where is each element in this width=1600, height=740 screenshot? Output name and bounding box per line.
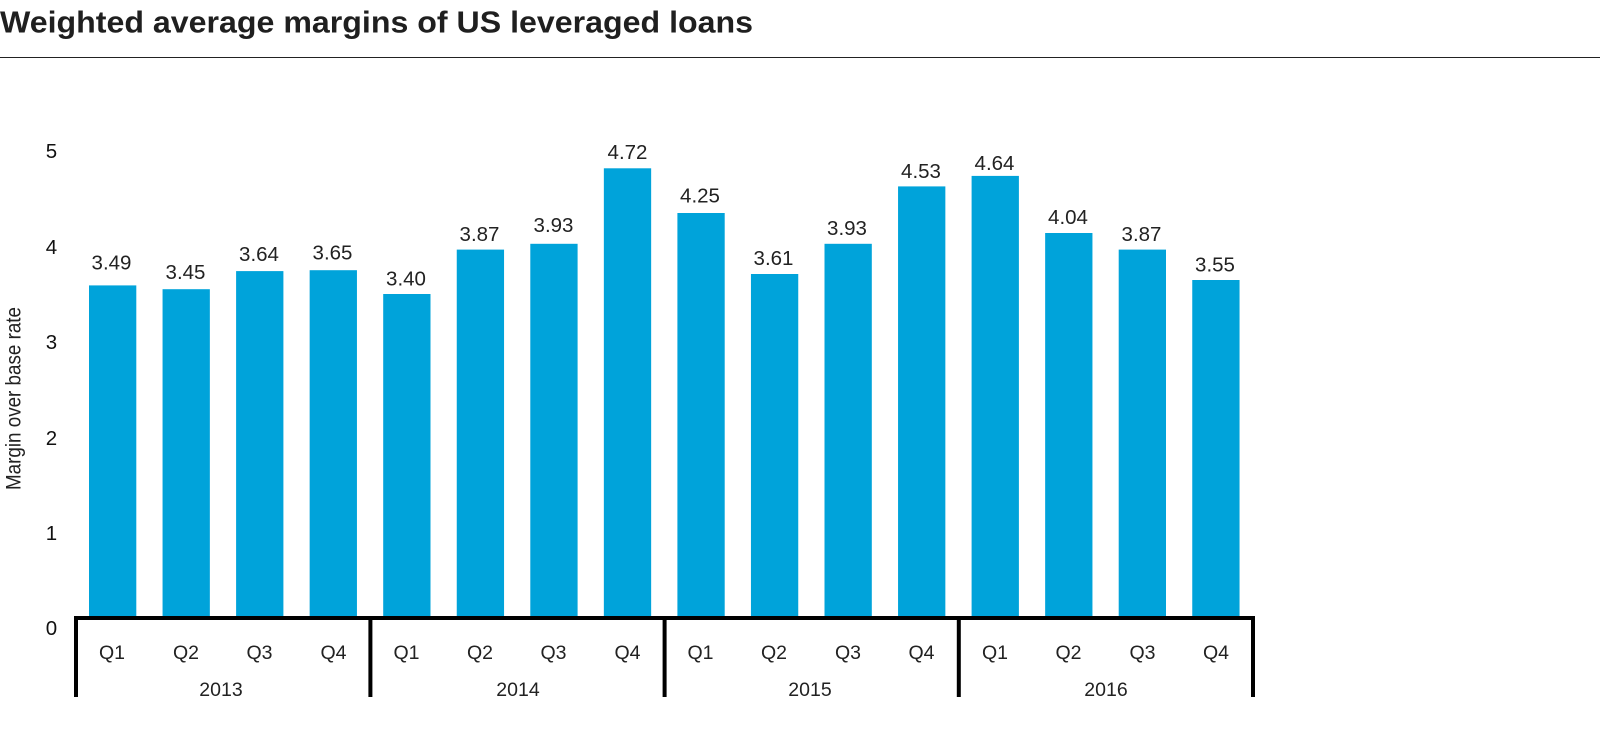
bars <box>89 168 1240 618</box>
year labels <box>199 679 1128 701</box>
y axis labels: 1 <box>46 522 57 545</box>
quarter labels: Q4 <box>614 642 641 664</box>
y axis labels: 2 <box>46 427 57 450</box>
quarter labels: Q1 <box>393 642 420 664</box>
y axis labels: 3 <box>46 331 57 354</box>
value labels: 3.87 <box>460 223 499 246</box>
year labels: 2013 <box>199 679 243 701</box>
title: Weighted average margins of US leveraged loans <box>0 4 753 40</box>
value labels: 3.87 <box>1122 223 1161 246</box>
quarter labels: Q4 <box>1203 642 1229 664</box>
value labels: 3.65 <box>313 242 352 264</box>
quarter labels: Q1 <box>99 642 125 664</box>
value labels: 3.40 <box>386 268 426 290</box>
value labels: 3.93 <box>827 217 867 240</box>
year labels: 2016 <box>1084 679 1128 701</box>
y axis labels <box>46 140 57 640</box>
quarter labels: Q1 <box>982 642 1008 664</box>
value labels: 3.49 <box>92 252 131 274</box>
y axis labels: 5 <box>46 140 57 163</box>
quarter labels <box>99 642 1229 664</box>
value labels: 4.25 <box>680 184 720 208</box>
year labels: 2014 <box>496 679 540 701</box>
y axis labels: 0 <box>46 617 57 640</box>
value labels: 3.61 <box>754 247 793 270</box>
quarter labels: Q2 <box>467 642 493 664</box>
quarter labels: Q2 <box>761 642 787 664</box>
quarter labels: Q4 <box>320 642 347 664</box>
value labels: 3.55 <box>1195 254 1235 276</box>
value labels: 3.45 <box>166 261 205 284</box>
quarter labels: Q3 <box>540 642 567 664</box>
quarter labels: Q3 <box>835 642 861 664</box>
quarter labels: Q1 <box>687 642 714 664</box>
x axis <box>74 616 1255 697</box>
value labels: 4.72 <box>608 141 647 164</box>
quarter labels: Q2 <box>1055 642 1082 664</box>
value labels: 4.53 <box>901 160 941 183</box>
quarter labels: Q3 <box>1129 642 1156 664</box>
quarter labels: Q4 <box>908 642 935 664</box>
value labels: 3.64 <box>239 243 279 266</box>
value labels: 3.93 <box>534 214 573 237</box>
year labels: 2015 <box>788 679 832 701</box>
y axis title: Margin over base rate <box>2 307 26 490</box>
value labels: 4.64 <box>975 152 1014 175</box>
value labels: 4.04 <box>1048 206 1088 229</box>
value labels <box>92 141 1235 290</box>
y axis labels: 4 <box>46 236 57 259</box>
quarter labels: Q2 <box>173 642 199 664</box>
quarter labels: Q3 <box>246 642 273 664</box>
